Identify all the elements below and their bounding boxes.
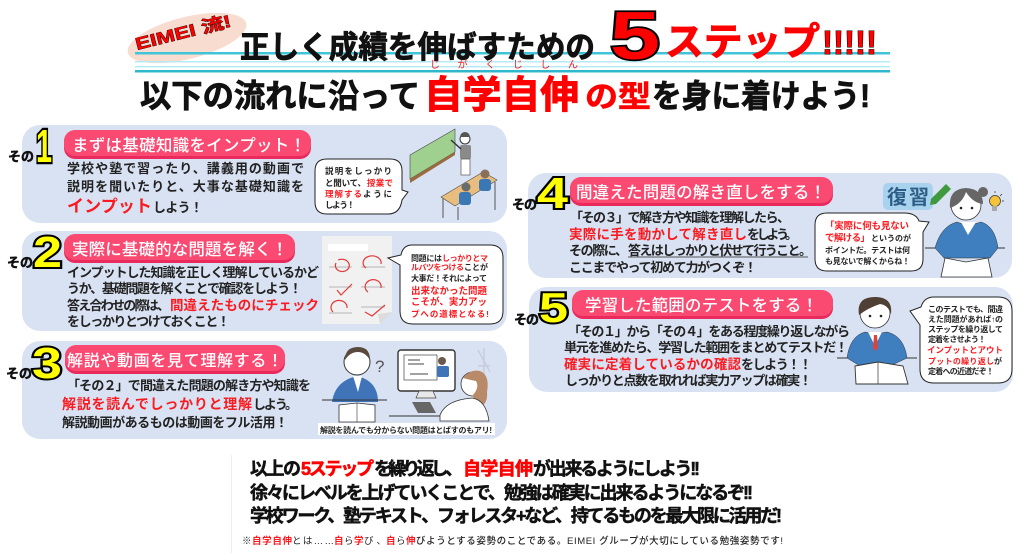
footnote: 自 — [334, 535, 344, 547]
speech bubble: が — [994, 356, 1002, 366]
icon: light bulb — [990, 191, 1004, 211]
speech bubble: ポイントだ。テストは何 — [825, 245, 910, 255]
body text: 解説動画があるものは動画をフル活用！ — [62, 415, 288, 430]
body text: 説明を聞いたりと、大事な基礎知識を — [67, 179, 304, 194]
body text: をしよう！！ — [741, 357, 812, 372]
speech bubble: ステップを繰り返して — [928, 324, 1003, 334]
speech bubble: 理解する — [325, 189, 362, 199]
heading pill: 間違えた問題の解き直しをする！ — [576, 183, 826, 202]
summary text — [231, 455, 783, 553]
speech bubble: こそが、実力アッ — [411, 296, 487, 308]
body text: 実際に手を動かして解き直し — [569, 226, 747, 242]
speech bubble: 出来なかった問題 — [411, 285, 487, 297]
caption: 解説を読んでも分からない問題はとばすのもアリ! — [320, 425, 492, 435]
speech bubble: えた問題があれば↑の — [928, 314, 1003, 324]
summary line 1: 自学自伸 — [463, 458, 533, 479]
summary line 1: 以上の — [250, 459, 301, 479]
speech bubble: プットの繰り返し — [928, 356, 994, 366]
panel: step 3 — [6, 339, 507, 439]
speech bubble: ルバツをつける — [411, 263, 464, 272]
speech bubble: 定着をさせよう！ — [928, 334, 986, 344]
heading pill: 学習した範囲のテストをする！ — [585, 296, 818, 315]
step number 1: 1 — [36, 120, 52, 172]
speech bubble — [815, 213, 929, 271]
furigana: じがくじしん — [430, 58, 578, 71]
speech bubble: 「実際に何も見ない — [825, 220, 909, 232]
speech bubble: 説明をしっかり — [325, 166, 392, 176]
step number 3: 3 — [32, 339, 62, 388]
speech bubble: と聞いて、 — [325, 178, 366, 188]
summary line 1: が出来るようにしよう!! — [533, 458, 700, 479]
heading pill: 実際に基礎的な問題を解く！ — [72, 240, 288, 259]
header — [123, 0, 890, 117]
speech bubble: しっかりとマ — [442, 254, 488, 263]
body text: しよう！ — [153, 200, 203, 215]
speech bubble: 授業で — [367, 178, 393, 188]
red word ステップ: ステップ — [665, 22, 820, 64]
speech bubble: インプットとアウト — [927, 345, 1003, 355]
step label その: その — [6, 366, 32, 381]
icon: 復習 badge — [883, 183, 951, 210]
badge: EIMEI流 — [123, 3, 251, 73]
step label その: その — [7, 255, 33, 270]
illustration: student and video lesson — [322, 347, 490, 422]
summary line 3: 学校ワーク、塾テキスト、フォレスタ+など、持てるものを最大限に活用だ! — [250, 505, 782, 526]
panel: step 5 — [514, 284, 1013, 392]
speech bubble: で解ける」 — [825, 232, 870, 244]
speech bubble: ことが — [464, 262, 488, 272]
speech bubble: も見ないで解くからね！ — [825, 256, 910, 266]
step label その: その — [8, 149, 34, 164]
title line 1: 正しく成績を伸ばすための — [240, 30, 595, 65]
step number 4: 4 — [537, 169, 569, 218]
panel: step 4 — [512, 169, 1012, 278]
big number 5: 5 — [610, 0, 660, 74]
summary line 1 — [250, 458, 700, 479]
body text — [564, 324, 850, 388]
footnote: びようとする姿勢のことである。EIMEI グループが大切にしている勉強姿勢です! — [416, 535, 783, 547]
body text: ここまでやって初めて力がつくぞ！ — [569, 260, 757, 275]
body text: 間違えたものにチェック — [170, 297, 319, 313]
footnote: 自 — [386, 535, 396, 547]
speech bubble — [315, 159, 408, 214]
panel: step 2 — [7, 228, 507, 331]
icon: 復習 badge: 復習 — [887, 186, 929, 209]
body text: インプットした知識を正しく理解しているかど — [67, 265, 319, 280]
body text: をしっかりとつけておくこと！ — [67, 314, 230, 329]
footnote: ら — [396, 536, 406, 547]
body text — [67, 161, 304, 216]
illustration: classroom — [410, 129, 497, 220]
speech bubble — [910, 297, 1012, 383]
body text: 「その１」から「その４」をある程度繰り返しながら — [568, 324, 850, 339]
exclamation marks: !!!!! — [822, 24, 877, 61]
body text: しっかりと点数を取れれば実力アップは確実！ — [565, 373, 812, 388]
footnote: ら — [344, 536, 354, 547]
speech bubble: 問題には — [411, 254, 442, 263]
badge: EIMEI流: EIMEI 流! — [133, 12, 233, 54]
speech bubble: プへの道標となる! — [411, 309, 489, 319]
title line 2: の型 — [585, 81, 651, 114]
illustration: student and video lesson: ? — [375, 357, 384, 376]
body text: 単元を進めたら、学習した範囲をまとめてテストだ！ — [564, 340, 848, 355]
footnote: び、 — [364, 536, 386, 547]
heading pill — [65, 345, 285, 374]
title line 2 — [140, 75, 870, 117]
speech bubble: 大事だ！それによって — [411, 273, 487, 283]
footnote: とは…… — [292, 536, 334, 547]
summary line 1: を繰り返し、 — [374, 459, 463, 479]
step number 2: 2 — [33, 228, 62, 277]
body text: 「その３」で解き方や知識を理解したら、 — [570, 210, 790, 225]
heading pill — [64, 130, 311, 159]
speech bubble: というのが — [871, 233, 911, 243]
footnote: 伸 — [406, 535, 416, 547]
body text — [62, 378, 311, 430]
title line 2: 以下の流れに沿って — [140, 78, 420, 114]
summary line 2: 徐々にレベルを上げていくことで、勉強は確実に出来るようになるぞ!! — [250, 483, 753, 503]
speech bubble: しよう！ — [325, 200, 355, 210]
body text: をしよう。 — [747, 227, 798, 242]
title line 2: を身に着けよう! — [652, 78, 870, 114]
illustration: woman studying — [925, 187, 1005, 277]
body text: 学校や塾で習ったり、講義用の動画で — [67, 161, 304, 176]
heading pill: 解説や動画を見て理解する！ — [67, 352, 283, 370]
step label その: その — [512, 197, 537, 212]
body text: 確実に定着しているかの確認 — [564, 357, 742, 372]
speech bubble: 定着への近道だぞ！ — [928, 366, 994, 376]
speech bubble: このテストでも、間違 — [928, 304, 1003, 314]
heading pill — [570, 177, 833, 206]
body text: 答えはしっかりと伏せて行うこと。 — [628, 243, 812, 258]
speech bubble — [388, 245, 503, 324]
illustration: boy studying — [837, 297, 917, 384]
heading pill — [572, 290, 833, 319]
body text: インプット — [67, 197, 152, 216]
footnote: 学 — [354, 535, 364, 547]
body text — [569, 210, 812, 275]
step label その: その — [514, 312, 539, 327]
heading pill — [64, 234, 295, 263]
body text — [67, 265, 319, 329]
step number 5: 5 — [539, 284, 568, 331]
footnote: ※ — [242, 536, 252, 547]
body text: 「その２」で間違えた問題の解き方や知識を — [67, 378, 311, 393]
footnote: 自学自伸 — [252, 535, 292, 547]
body text: その際に、 — [569, 243, 628, 258]
panel: step 1 — [8, 120, 507, 223]
heading pill: まずは基礎知識をインプット！ — [72, 136, 306, 155]
body text: 答え合わせの際は、 — [67, 298, 170, 313]
illustration: graded paper — [322, 236, 392, 324]
body text: 解説を読んでしっかりと理解 — [62, 396, 252, 412]
speech bubble: ように — [363, 189, 392, 199]
title line 2: 自学自伸 — [424, 75, 579, 117]
summary line 1: 5ステップ — [301, 459, 374, 479]
body text: うか、基礎問題を解くことで確認をしよう！ — [67, 281, 302, 296]
body text: しよう。 — [253, 397, 298, 412]
footnote — [242, 535, 783, 547]
